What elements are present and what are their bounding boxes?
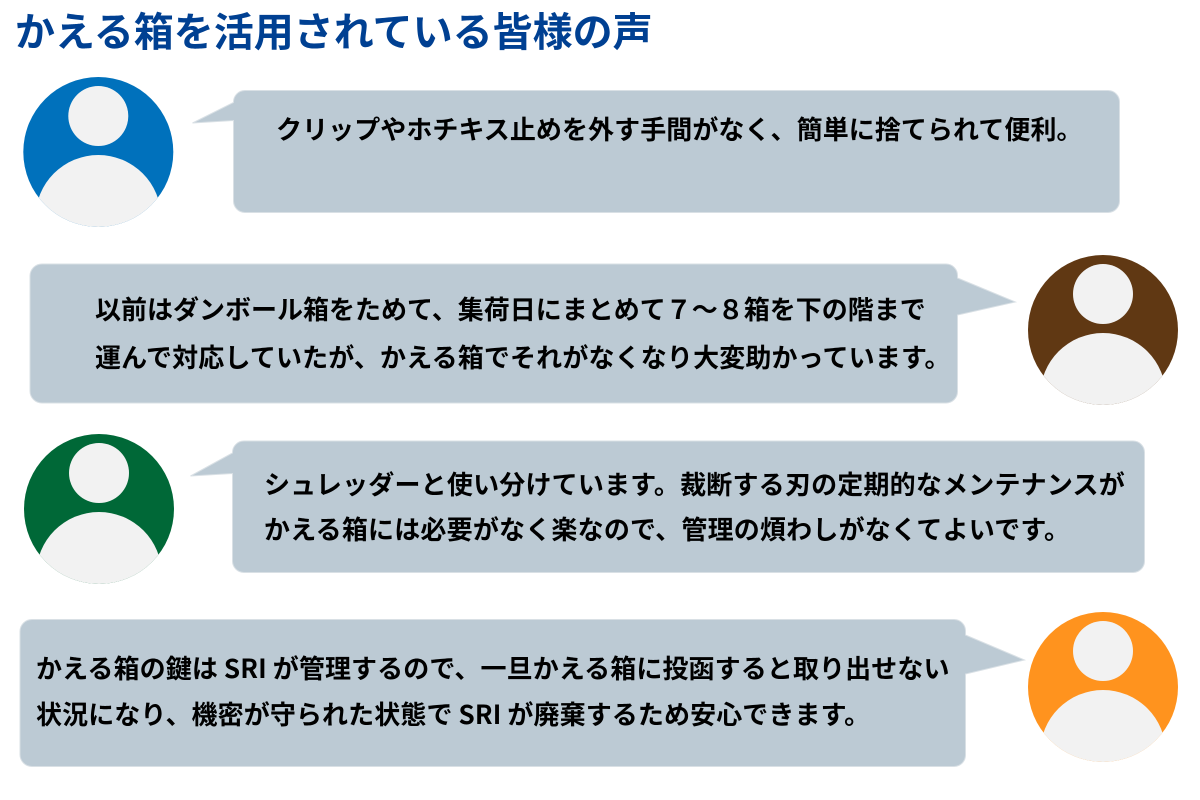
- avatar: blue: [23, 77, 174, 227]
- comment 2 text: [95, 290, 951, 375]
- avatar: green: [24, 434, 174, 584]
- speech bubble 3: [190, 441, 1144, 572]
- comment 1 text: クリップやホチキス止めを外す手間がなく、簡単に捨てられて便利。: [276, 110, 1083, 147]
- speech bubble 4: [20, 620, 1024, 766]
- comment 2 text: 以前はダンボール箱をためて、集荷日にまとめて７～８箱を下の階まで: [95, 290, 926, 327]
- title: かえる箱を活用されている皆様の声: [15, 0, 653, 58]
- comment 3 text: かえる箱には必要がなく楽なので、管理の煩わしがなくてよいです。: [264, 510, 1070, 547]
- speech bubble 1: [192, 90, 1120, 212]
- comment 3 text: シュレッダーと使い分けています。裁断する刃の定期的なメンテナンスが: [264, 465, 1125, 502]
- comment 3 text: [264, 465, 1125, 547]
- comment 4 text: 状況になり、機密が守られた状態で SRI が廃棄するため安心できます。: [36, 695, 870, 732]
- avatar: brown: [1028, 255, 1178, 405]
- comment 4 text: [36, 649, 950, 732]
- speech bubble 2: [30, 264, 1016, 403]
- comment 4 text: かえる箱の鍵は SRI が管理するので、一旦かえる箱に投函すると取り出せない: [36, 649, 950, 686]
- comment 2 text: 運んで対応していたが、かえる箱でそれがなくなり大変助かっています。: [95, 338, 951, 375]
- avatar: orange: [1028, 612, 1178, 762]
